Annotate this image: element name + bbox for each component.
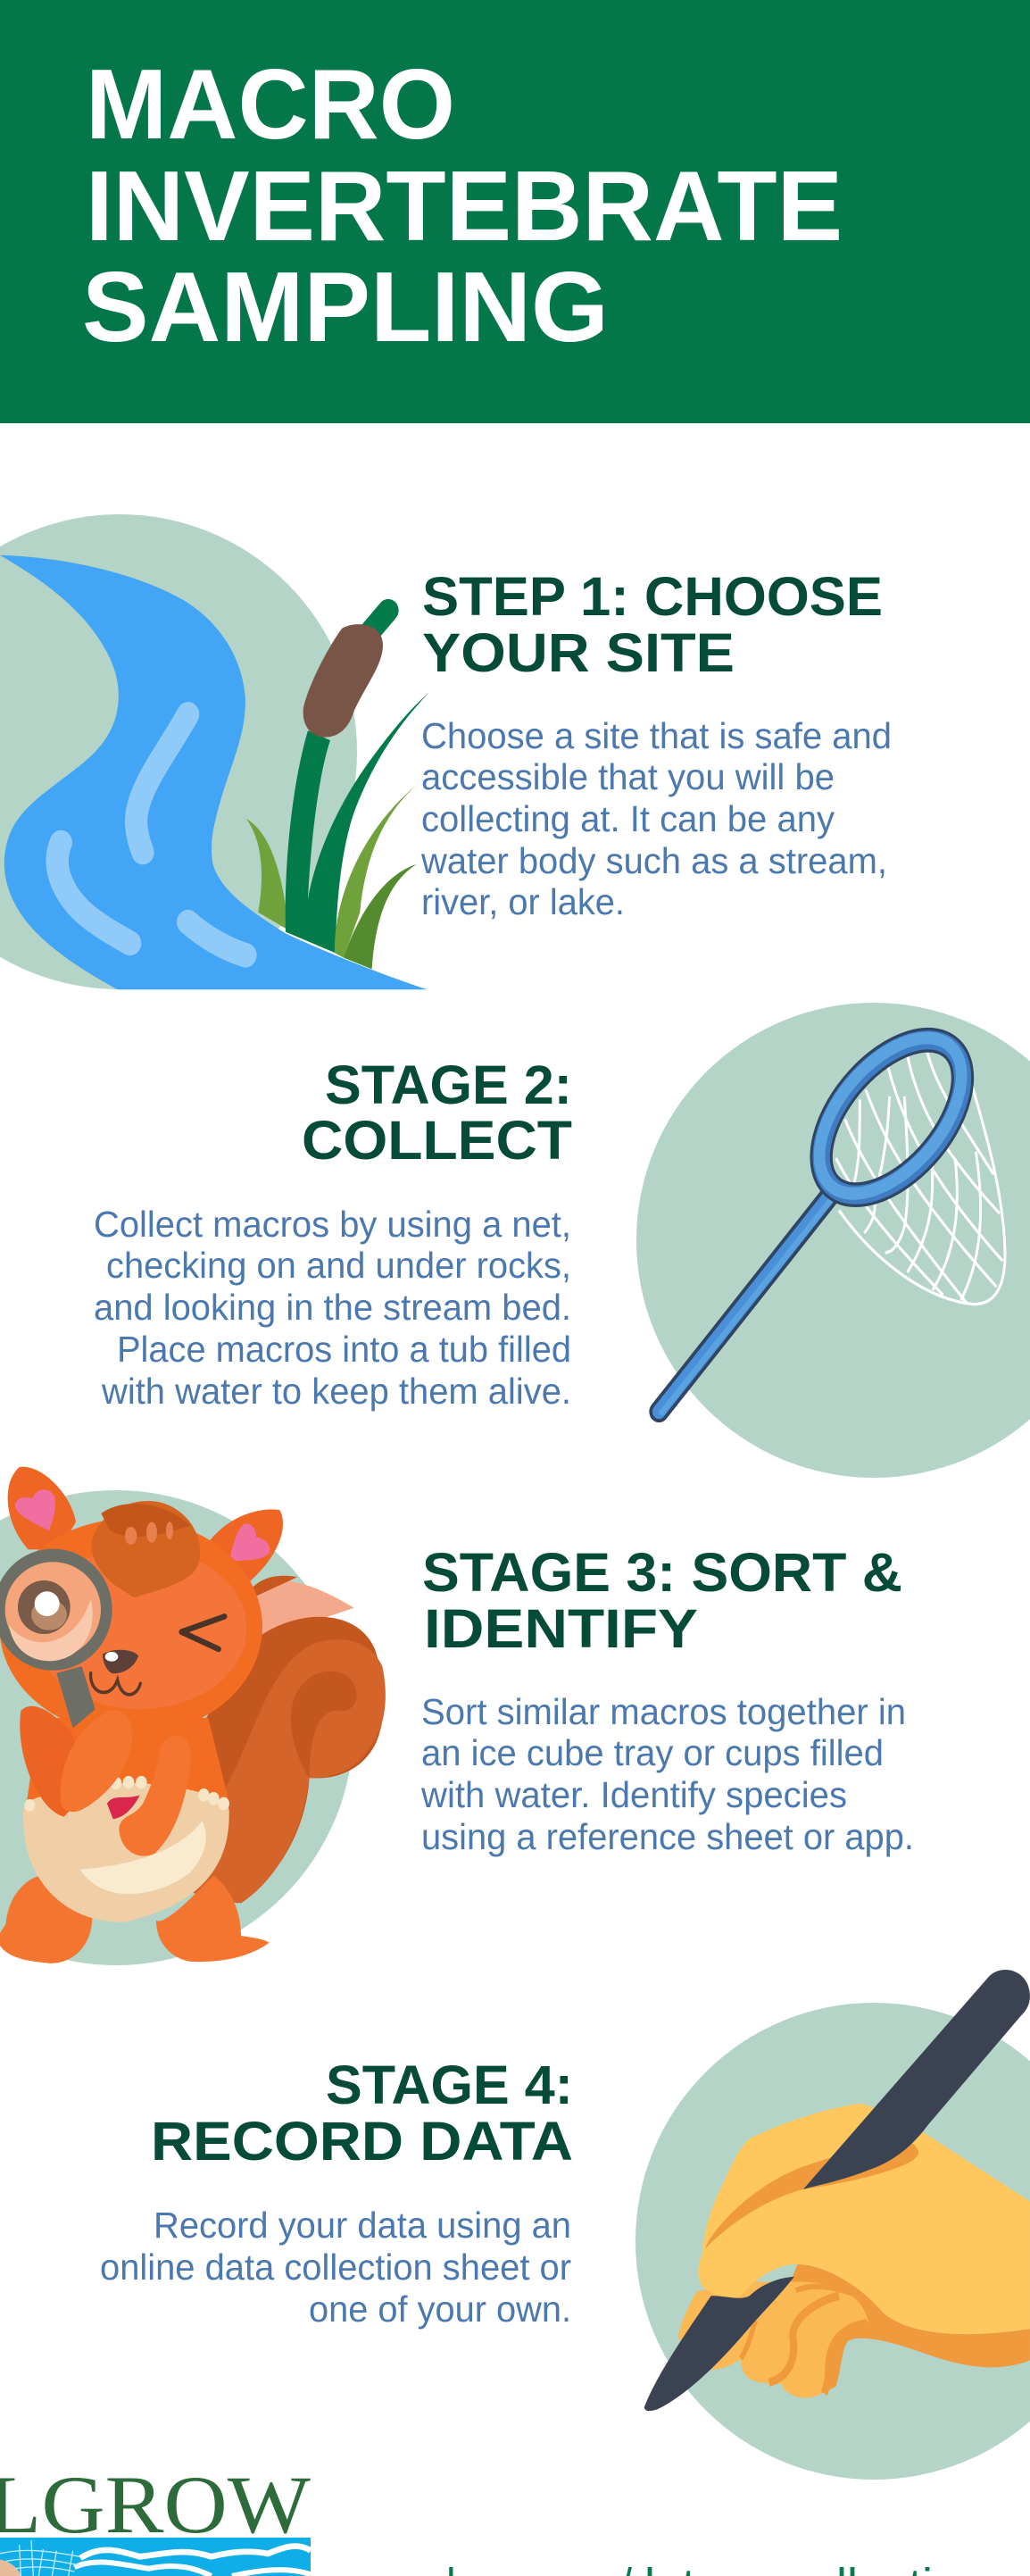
heading: stage 4: STAGE 4:: [326, 2055, 573, 2115]
icon: pen: [644, 1970, 1030, 2411]
text block: stage 2: checking on and under rocks,: [106, 1245, 571, 1286]
heading: step 1: [422, 566, 883, 683]
icon: squirrel tail: [194, 1576, 386, 1904]
text block: stage 2: Collect macros by using a net,: [94, 1204, 571, 1245]
text block: step 1: river, or lake.: [421, 881, 625, 922]
title: [82, 49, 843, 363]
icon: squirrel body: [23, 1718, 229, 1922]
panel: stage 2 illustration, dip net: [636, 1003, 1030, 1478]
icon: net hoop: [793, 1010, 989, 1223]
text block: stage 4: Record your data using an: [154, 2205, 571, 2246]
text block: stage 2: Place macros into a tub filled: [117, 1329, 571, 1370]
text block: stage 3: with water. Identify species: [420, 1774, 847, 1815]
icon: net handle: [659, 1197, 832, 1413]
icon: squirrel feet: [0, 1876, 270, 1963]
heading: stage 4: [151, 2055, 573, 2172]
icon: river: [0, 555, 428, 989]
icon: cattail reeds: [246, 611, 428, 969]
heading: step 1: STEP 1: CHOOSE: [422, 566, 883, 627]
text block: stage 3: Sort similar macros together in: [421, 1691, 906, 1732]
heading: stage 2: STAGE 2:: [325, 1055, 572, 1115]
heading: step 1: YOUR SITE: [422, 622, 735, 683]
text block: stage 2: [94, 1204, 571, 1412]
text block: step 1: Choose a site that is safe and: [421, 715, 892, 756]
text block: stage 4: online data collection sheet or: [100, 2247, 571, 2288]
text block: stage 4: one of your own.: [309, 2288, 571, 2330]
text block: stage 2: and looking in the stream bed.: [94, 1287, 571, 1328]
icon: arms: [20, 1706, 191, 1856]
text block: step 1: collecting at. It can be any: [421, 798, 835, 839]
heading: stage 2: COLLECT: [302, 1110, 572, 1171]
icon: squirrel head: [0, 1501, 262, 1735]
text block: stage 2: with water to keep them alive.: [101, 1371, 571, 1412]
icon: hand: [678, 2104, 1030, 2398]
text block: stage 3: an ice cube tray or cups filled: [421, 1732, 884, 1773]
heading: stage 4: RECORD DATA: [151, 2111, 573, 2172]
title: SAMPLING: [82, 252, 609, 363]
title: INVERTEBRATE: [86, 151, 843, 262]
panel: stage 4 illustration, hand writing: [635, 1970, 1030, 2480]
text block: step 1: [420, 715, 892, 922]
icon: net mesh: [836, 1051, 1005, 1305]
text block: step 1: accessible that you will be: [421, 756, 835, 797]
text block: stage 4: [100, 2205, 571, 2330]
panel: stage 3 illustration, squirrel with magnifier: [0, 1467, 386, 1965]
title: MACRO: [86, 49, 455, 160]
heading: stage 3: IDENTIFY: [424, 1598, 698, 1659]
icon: magnifying glass: [0, 1555, 106, 1728]
heading: stage 2: [302, 1055, 572, 1171]
header banner: [0, 0, 1030, 423]
icon: squirrel ears: [8, 1467, 283, 1584]
text block: stage 3: using a reference sheet or app.: [421, 1816, 914, 1857]
icon: front paw: [61, 1711, 133, 1812]
panel: step 1 illustration, river and reeds: [0, 514, 428, 989]
text block: stage 3: [420, 1691, 914, 1857]
heading: stage 3: [422, 1542, 902, 1659]
heading: stage 3: STAGE 3: SORT &: [422, 1542, 902, 1603]
text block: step 1: water body such as a stream,: [420, 840, 887, 881]
